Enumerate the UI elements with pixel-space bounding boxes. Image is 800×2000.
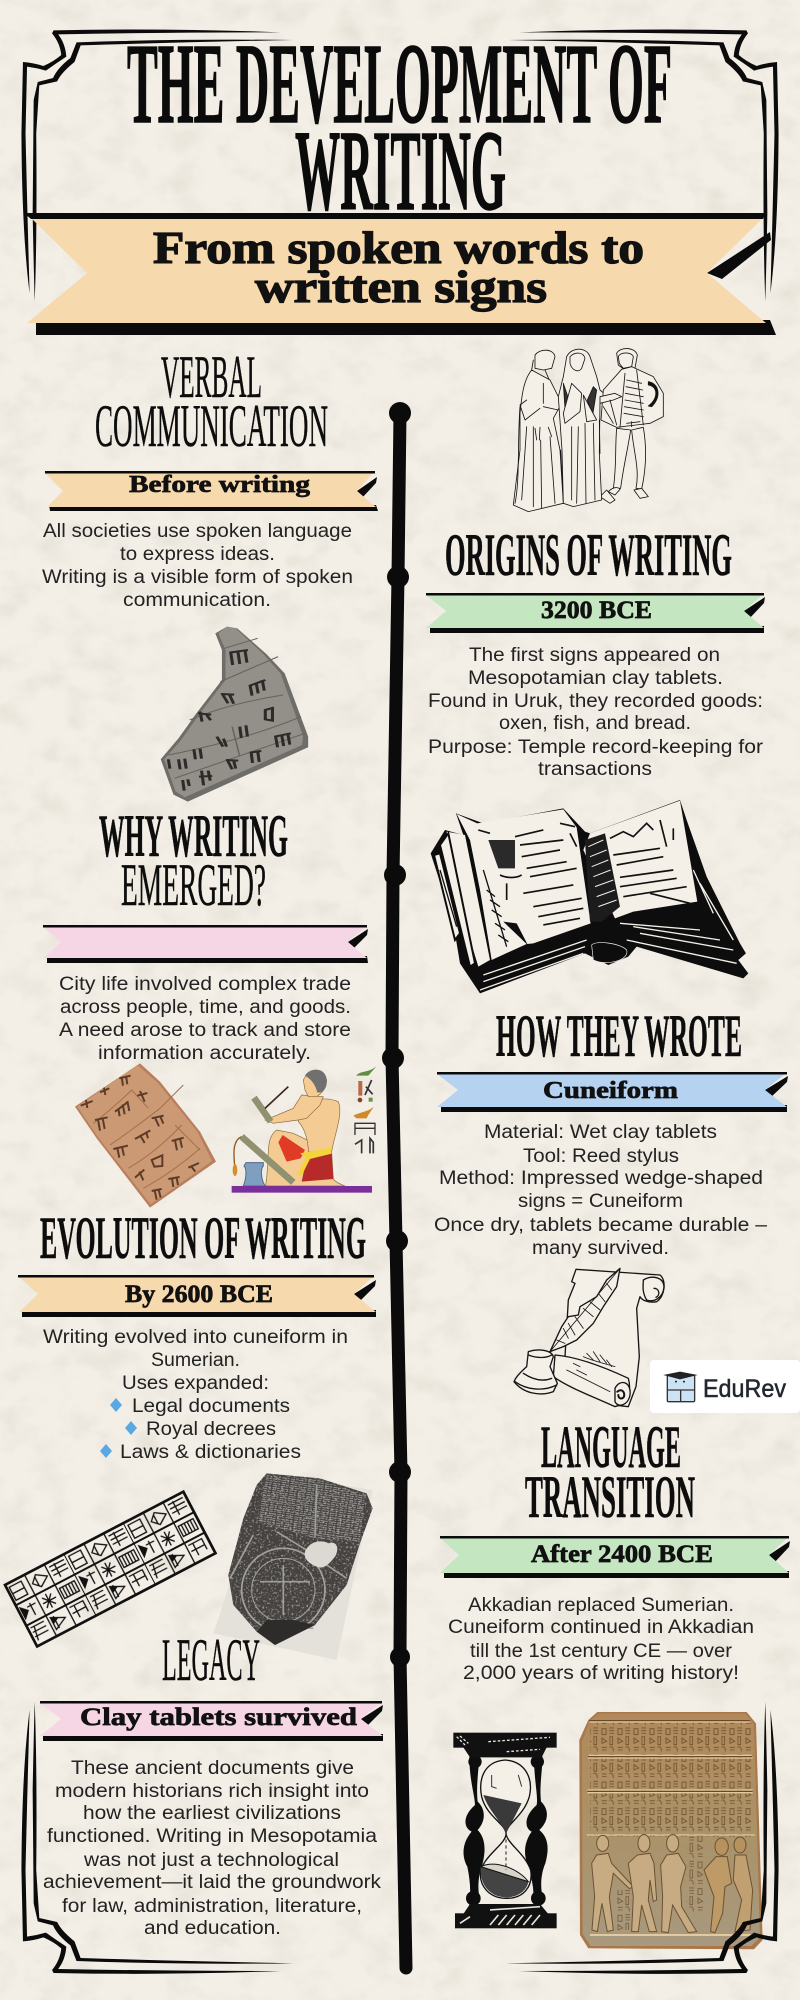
panel: legacy: LEGACY: [162, 1627, 260, 1693]
heading: verbal communication: VERBAL: [161, 344, 262, 410]
text: evolution of writing: Uses expanded:: [122, 1373, 269, 1394]
logo: EduRev: [650, 1360, 800, 1413]
icon: babylonian map stone: [213, 1473, 373, 1660]
icon: hourglass: [453, 1733, 557, 1928]
text: language transition: 2,000 years of writing history!: [463, 1663, 739, 1684]
ribbon: by 2600 BCE: [18, 1275, 376, 1317]
text: legacy: for law, administration, literature,: [62, 1896, 362, 1917]
heading: why writing emerged: EMERGED?: [121, 852, 266, 918]
ornamental frame: bottom left: [21, 1702, 293, 1974]
heading: verbal communication: [95, 344, 328, 459]
text: why writing emerged: [59, 974, 351, 1064]
text: legacy: [43, 1758, 382, 1939]
text: how they wrote: Material: Wet clay tablets: [484, 1122, 717, 1143]
text: origins of writing: Purpose: Temple record-keeping for: [428, 737, 764, 758]
text: legacy: how the earliest civilizations: [83, 1803, 341, 1824]
icon: scribe: [232, 1066, 377, 1193]
text: origins of writing: The first signs appeared on: [469, 645, 720, 666]
icon: scroll and quill: [514, 1268, 664, 1407]
text: evolution of writing: Sumerian.: [151, 1350, 240, 1371]
text: evolution of writing: [43, 1327, 348, 1463]
text: before writing: Writing is a visible form of spoken: [42, 567, 353, 588]
text: why writing emerged: across people, time, and goods.: [60, 997, 351, 1018]
ribbon: clay tablets survived: [40, 1701, 383, 1741]
text: why writing emerged: A need arose to track and store: [59, 1020, 351, 1041]
heading: why writing emerged: [99, 803, 288, 918]
text: how they wrote: many survived.: [532, 1238, 669, 1259]
panel: origins of writing: [426, 522, 800, 1974]
text: legacy: achievement—it laid the groundwork: [43, 1872, 382, 1893]
panel: language transition: [440, 1414, 790, 1684]
text: origins of writing: oxen, fish, and bread.: [499, 713, 691, 734]
text: why writing emerged: information accurately.: [98, 1043, 311, 1064]
text: how they wrote: Method: Impressed wedge-shaped: [439, 1168, 763, 1189]
text: how they wrote: Once dry, tablets became durable –: [434, 1215, 767, 1236]
ribbon: cuneiform: Cuneiform: [543, 1078, 678, 1104]
text: evolution of writing: Legal documents: [132, 1396, 290, 1417]
text: language transition: Cuneiform continued in Akkadian: [448, 1617, 754, 1638]
text: origins of writing: transactions: [538, 759, 652, 780]
panel: why writing emerged: [43, 803, 377, 1208]
ribbon: by 2600 BCE: By 2600 BCE: [125, 1281, 273, 1308]
ornamental frame: top right: [507, 30, 779, 302]
ribbon: before writing: Before writing: [129, 472, 310, 498]
text: before writing: [42, 521, 353, 611]
text: origins of writing: [428, 645, 764, 780]
ornamental frame: top left: [21, 30, 293, 302]
logo: EduRev: EduRev: [703, 1375, 786, 1403]
ribbon: 3200 BCE: [426, 593, 765, 633]
subtitle ribbon: From spoken words to: [153, 222, 644, 273]
subtitle ribbon: [24, 213, 776, 335]
panel: why writing emerged: WHY WRITING: [99, 803, 288, 869]
ribbon: after 2400 BCE: [440, 1536, 790, 1578]
ornamental frame: bottom right: [507, 1702, 779, 1974]
text: how they wrote: [434, 1122, 767, 1259]
heading: language transition: [525, 1414, 695, 1530]
text: evolution of writing: Laws & dictionaries: [120, 1442, 301, 1463]
text: evolution of writing: Writing evolved into cuneiform in: [43, 1327, 348, 1348]
timeline: [382, 402, 411, 1968]
text: legacy: modern historians rich insight into: [55, 1781, 369, 1802]
ribbon: blank pink: [43, 925, 368, 963]
icon: three medieval figures: [513, 349, 663, 512]
text: legacy: and education.: [144, 1918, 281, 1939]
text: language transition: till the 1st century CE — over: [470, 1641, 733, 1662]
panel: legacy: [21, 1627, 383, 1974]
subtitle ribbon: written signs: [255, 261, 547, 312]
text: evolution of writing: Royal decrees: [146, 1419, 276, 1440]
icon: cuneiform grid tablet: [5, 1492, 216, 1646]
text: before writing: to express ideas.: [120, 544, 275, 565]
text: language transition: Akkadian replaced Sumerian.: [468, 1595, 734, 1616]
text: legacy: was not just a technological: [83, 1850, 339, 1871]
title: [127, 20, 672, 234]
ribbon: cuneiform: [437, 1072, 788, 1112]
text: how they wrote: signs = Cuneiform: [518, 1191, 683, 1212]
text: why writing emerged: City life involved complex trade: [59, 974, 351, 995]
text: language transition: [448, 1595, 754, 1684]
panel: evolution of writing: [5, 1205, 376, 1660]
text: origins of writing: Found in Uruk, they recorded goods:: [428, 691, 763, 712]
icon: grey clay tablet: [161, 627, 308, 802]
text: how they wrote: Tool: Reed stylus: [523, 1146, 679, 1167]
icon: brown clay tablet: [75, 1063, 216, 1208]
text: origins of writing: Mesopotamian clay tablets.: [468, 668, 723, 689]
ribbon: 3200 BCE: 3200 BCE: [541, 597, 652, 624]
panel: verbal communication: [42, 344, 378, 802]
text: before writing: All societies use spoken language: [43, 521, 352, 542]
image: egyptian stele: [579, 1712, 763, 1949]
text: before writing: communication.: [123, 590, 271, 611]
text: legacy: functioned. Writing in Mesopotamia: [47, 1826, 377, 1847]
ribbon: before writing: [45, 471, 378, 511]
text: EVOLUTION OF WRITING: [40, 1205, 366, 1271]
icon: open book: [431, 800, 748, 993]
panel: how they wrote: [434, 1003, 800, 1974]
ribbon: after 2400 BCE: After 2400 BCE: [531, 1541, 713, 1568]
panel: verbal communication: COMMUNICATION: [95, 393, 328, 459]
text: legacy: These ancient documents give: [71, 1758, 354, 1779]
ribbon: clay tablets survived: Clay tablets survived: [80, 1704, 357, 1731]
